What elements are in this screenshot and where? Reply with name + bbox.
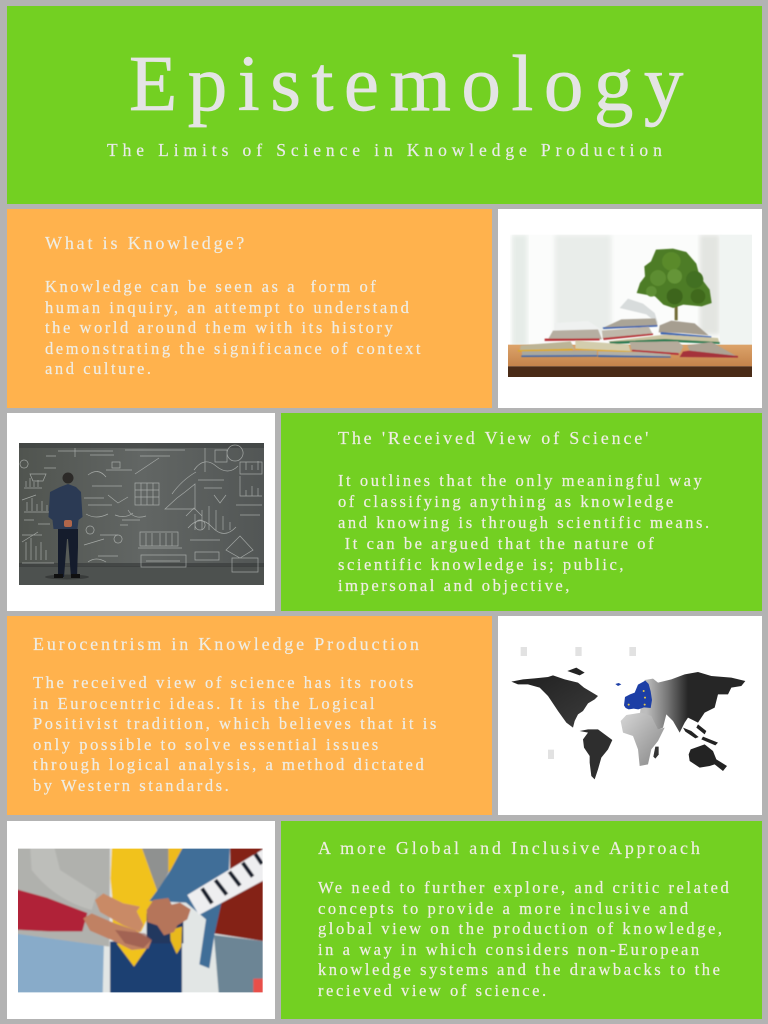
panel: books and tree photo bbox=[498, 209, 762, 408]
text: eurocentrism: The received view of science has its roots in Eurocentric ideas. It is the Logical Positivist tradition, which believes that it is only possible to solve essential issues through logical analysis, a method dictated by Western standards. bbox=[33, 673, 439, 794]
panel: chalkboard photo bbox=[7, 413, 275, 611]
chalkboard bbox=[19, 443, 264, 585]
hands bbox=[83, 893, 191, 950]
right person bbox=[149, 843, 267, 997]
text: received view: It outlines that the only meaningful way of classifying anything as knowledge and knowing is through scientific means. It can be argued that the nature of scientific knowledge is; public, impersonal and objective, bbox=[338, 471, 712, 595]
heading: global approach: A more Global and Inclusive Approach bbox=[318, 838, 703, 858]
photo background bbox=[102, 848, 261, 992]
chalk diagrams bbox=[20, 445, 262, 572]
title: Epistemology bbox=[129, 41, 694, 128]
table bbox=[508, 345, 752, 377]
panel: what is knowledge bbox=[7, 209, 492, 408]
books bbox=[518, 299, 738, 358]
panel: global and inclusive approach bbox=[281, 821, 762, 1019]
panel: received view of science bbox=[281, 413, 762, 611]
striped sleeve bbox=[187, 847, 267, 915]
asia bbox=[640, 672, 745, 733]
panel: world map bbox=[498, 616, 762, 815]
left person jeans and shirt bbox=[13, 843, 110, 997]
islands bbox=[683, 724, 718, 745]
text: global approach: We need to further explore, and critic related concepts to provide a more inclusive and global view on the production of knowledge, in a way in which considers non-European knowledge systems and the drawbacks to the recieved view of science. bbox=[318, 878, 731, 1000]
text: what is knowledge: Knowledge can be seen as a form of human inquiry, an attempt to understand the world around them with its history demonstrating the significance of context and culture. bbox=[45, 277, 423, 378]
panel: header bbox=[7, 6, 762, 204]
africa bbox=[621, 713, 665, 766]
red object bbox=[252, 978, 263, 992]
central and south america bbox=[573, 728, 612, 779]
australia bbox=[689, 744, 727, 771]
europe bbox=[624, 681, 652, 709]
world map bbox=[511, 668, 745, 779]
subtitle: The Limits of Science in Knowledge Production bbox=[107, 140, 667, 160]
center person bbox=[110, 843, 185, 997]
panel: eurocentrism bbox=[7, 616, 492, 815]
panel: hands together photo bbox=[7, 821, 275, 1019]
image backdrop bbox=[512, 235, 752, 346]
heading: received view: The 'Received View of Science' bbox=[338, 428, 651, 448]
red sleeve bbox=[13, 888, 87, 931]
icon: tree bbox=[637, 249, 712, 320]
watermark marks bbox=[521, 647, 636, 759]
heading: eurocentrism: Eurocentrism in Knowledge Production bbox=[33, 634, 422, 654]
person standing bbox=[45, 472, 89, 580]
heading: what is knowledge: What is Knowledge? bbox=[45, 233, 247, 253]
north america bbox=[511, 675, 598, 728]
